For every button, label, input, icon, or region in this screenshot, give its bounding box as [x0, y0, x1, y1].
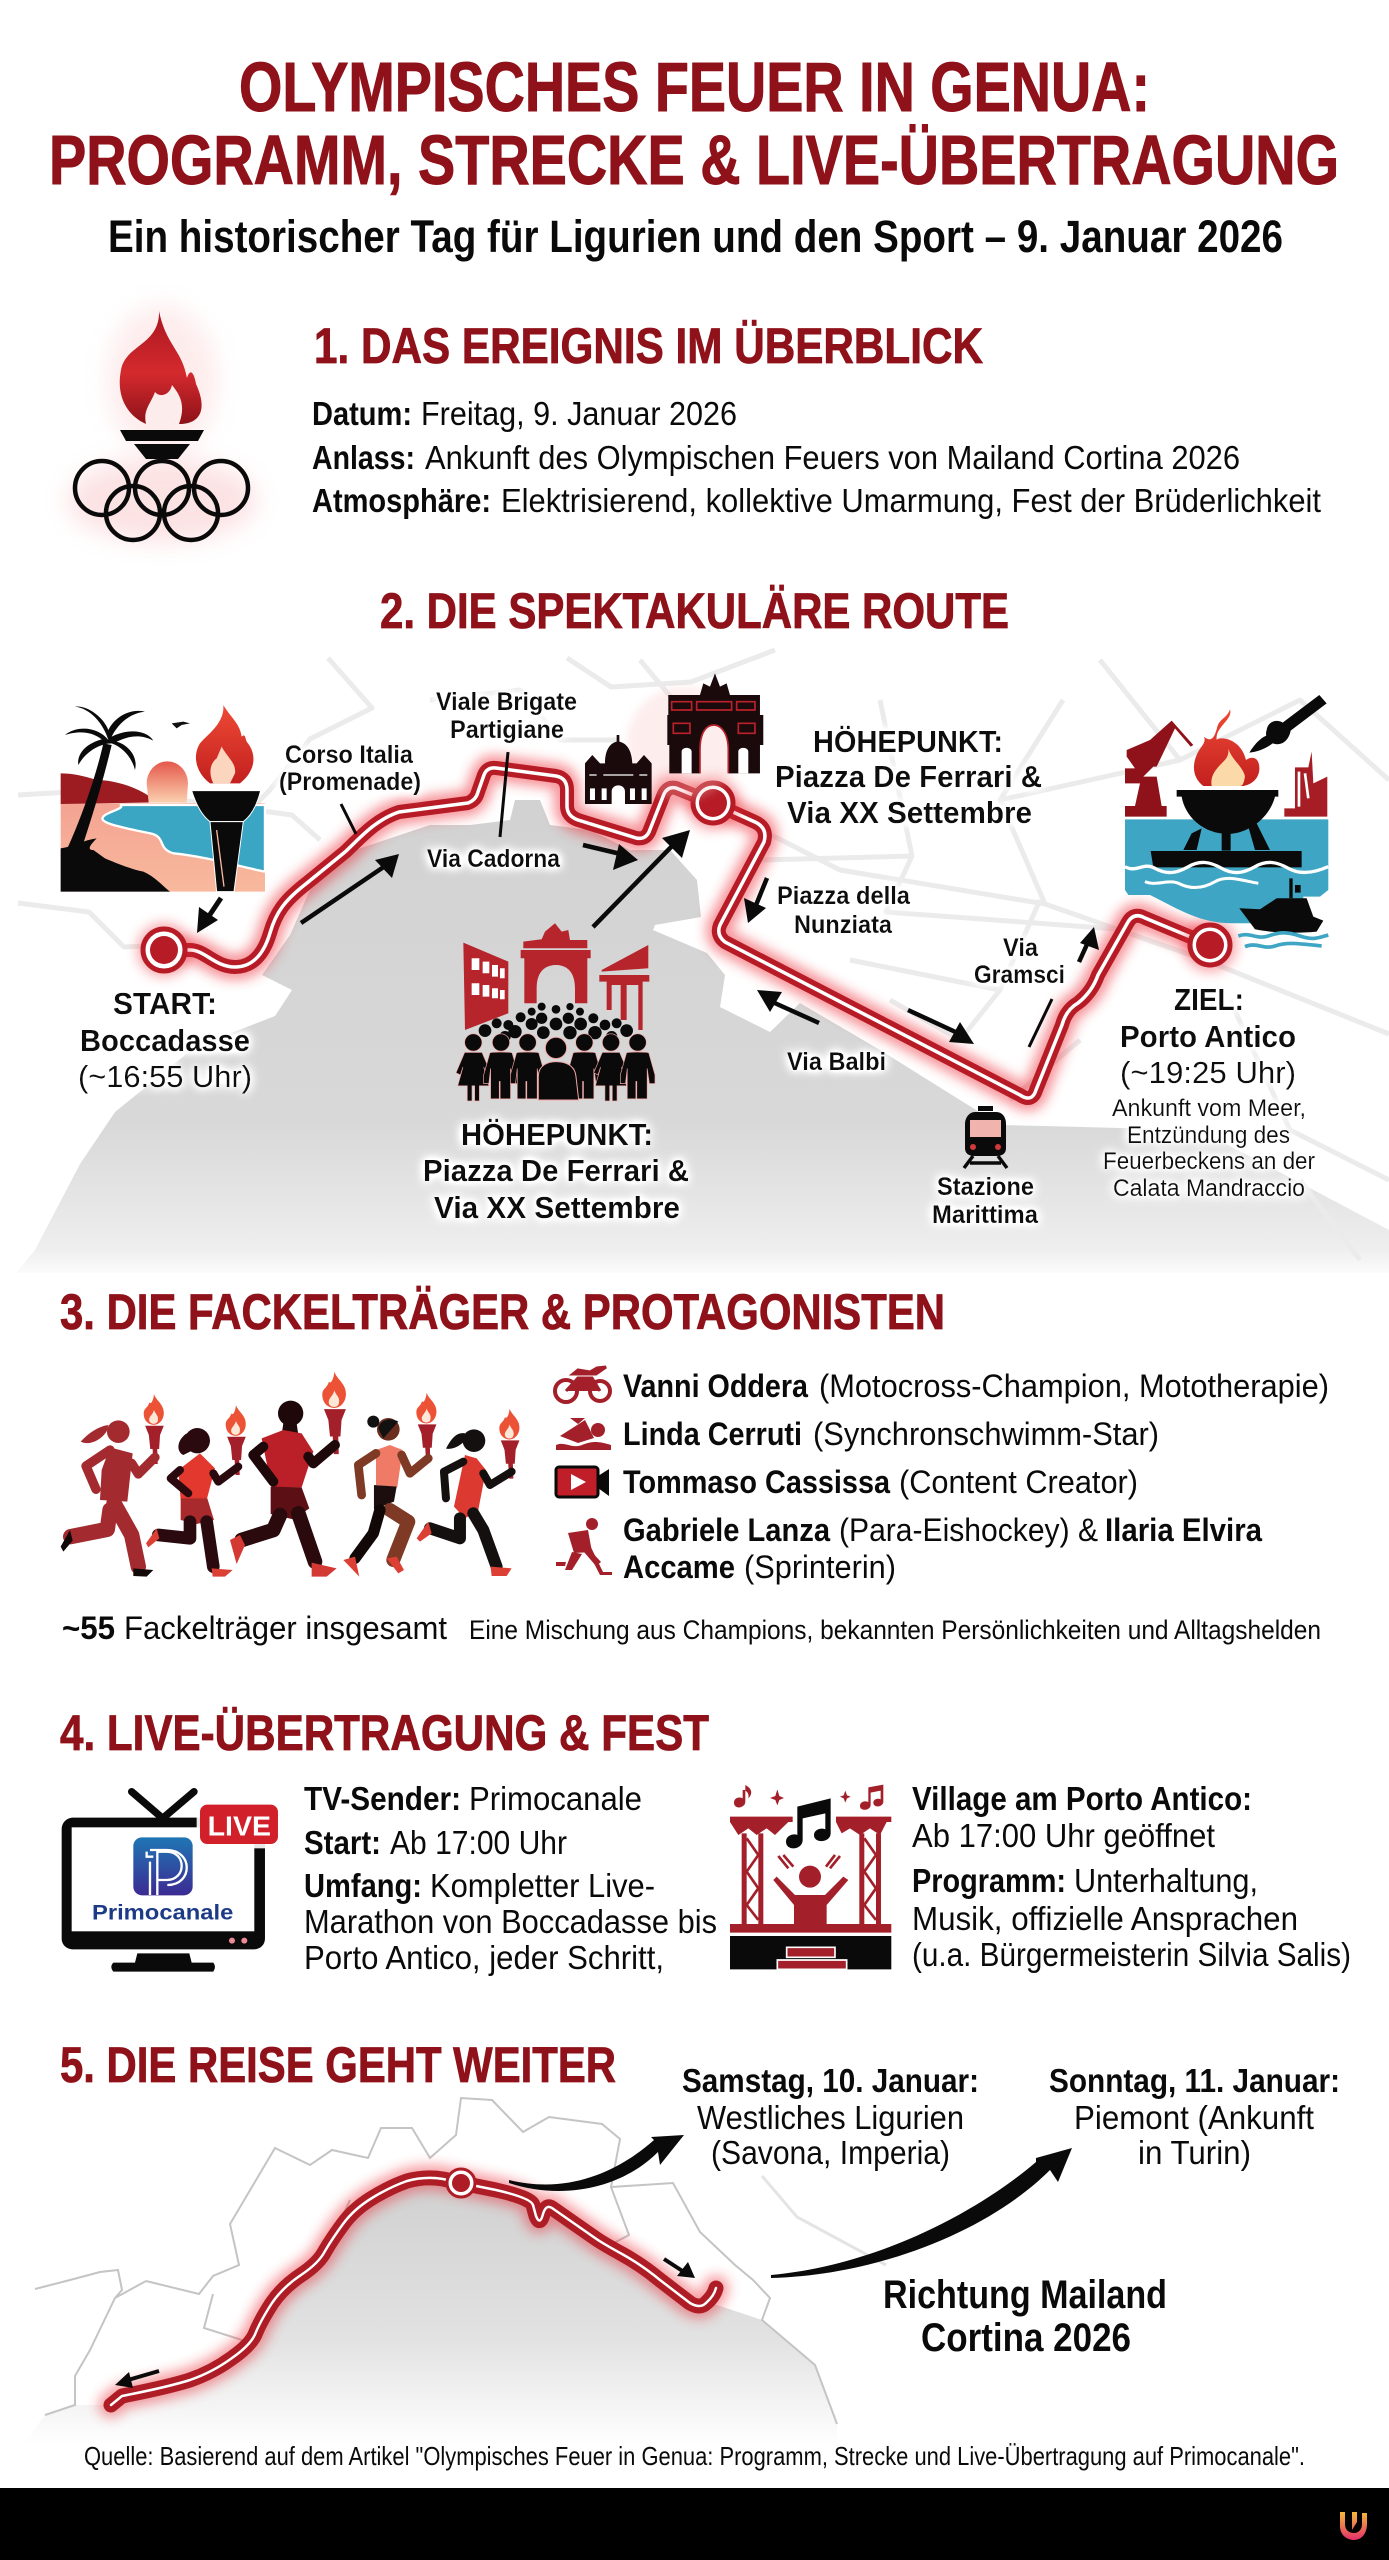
- highlight label right: HÖHEPUNKT:: [813, 724, 1003, 759]
- schedule: saturday: (Savona, Imperia): [711, 2134, 950, 2171]
- genoa marker: [447, 2169, 475, 2197]
- highlight label centre: [423, 1117, 689, 1225]
- entry: Linda Cerruti: Linda Cerruti: [623, 1416, 802, 1452]
- street labels: (Promenade): [279, 768, 421, 796]
- icon: brand logo: [1340, 2512, 1367, 2540]
- icon: harbour brazier: [1125, 695, 1328, 947]
- panel: TV broadcast text: [304, 1780, 717, 1976]
- icon: crowd at the piazza: [456, 923, 655, 1101]
- icon: concert stage: [730, 1785, 891, 1969]
- highlight label centre: Piazza De Ferrari &: [423, 1153, 689, 1188]
- icon: para hockey: [556, 1518, 612, 1575]
- overview facts: Freitag, 9. Januar 2026: [421, 395, 737, 432]
- icon: video camera: [556, 1467, 609, 1497]
- footer bar: [0, 2488, 1389, 2560]
- street labels: [279, 688, 1065, 1076]
- panel: TV broadcast text: Marathon von Boccadasse bis: [304, 1903, 717, 1940]
- entry: Tommaso Cassissa: [623, 1464, 1138, 1500]
- panel: TV broadcast text: Primocanale: [469, 1780, 642, 1817]
- street labels: Gramsci: [974, 961, 1065, 989]
- station label: Marittima: [932, 1201, 1039, 1229]
- runner 3: [230, 1372, 346, 1577]
- entry: Vanni Oddera: (Motocross-Champion, Mototherapie): [819, 1368, 1329, 1404]
- panel: liguria map: [27, 2098, 886, 2445]
- map: sea and harbour area: [16, 800, 1389, 1273]
- route glow line: [111, 2178, 716, 2405]
- entry: Lanza and Accame: Gabriele Lanza: [623, 1512, 830, 1548]
- runner 4: [343, 1393, 436, 1577]
- finish label: ZIEL:: [1174, 982, 1244, 1017]
- station label: [932, 1173, 1039, 1229]
- icon: train: [964, 1106, 1007, 1168]
- panel: TV broadcast text: Umfang:: [304, 1867, 422, 1904]
- icon: five torch runners: [61, 1372, 519, 1577]
- map: sea: [27, 2176, 837, 2445]
- schedule: sunday: Sonntag, 11. Januar:: [1049, 2062, 1340, 2099]
- icon: TV with live badge: Primocanale: [92, 1900, 233, 1924]
- street labels: Nunziata: [794, 911, 893, 939]
- finish label: Porto Antico: [1120, 1019, 1296, 1054]
- direction label: Cortina 2026: [921, 2316, 1131, 2360]
- start label: (~16:55 Uhr): [78, 1059, 252, 1094]
- schedule: saturday: Westliches Ligurien: [697, 2099, 964, 2136]
- overview facts: Elektrisierend, kollektive Umarmung, Fest der Brüderlichkeit: [501, 482, 1321, 519]
- icon: triumphal arch: [627, 673, 763, 800]
- panel: village text: Unterhaltung,: [1074, 1862, 1258, 1899]
- street labels: Corso Italia: [285, 741, 414, 769]
- panel: TV broadcast text: Ab 17:00 Uhr: [390, 1824, 567, 1861]
- highlight label centre: HÖHEPUNKT:: [461, 1117, 653, 1152]
- panel: village text: Programm:: [912, 1862, 1066, 1899]
- icon: swimmer: [556, 1418, 611, 1450]
- schedule: sunday: in Turin): [1138, 2134, 1251, 2171]
- icon: TV with live badge: LIVE: [208, 1810, 271, 1841]
- panel: TV broadcast text: Porto Antico, jeder Schritt,: [304, 1939, 664, 1976]
- panel: genoa route map: [16, 650, 1389, 1273]
- panel: village text: [912, 1780, 1351, 1973]
- entry: Linda Cerruti: (Synchronschwimm-Star): [813, 1416, 1159, 1452]
- panel: TV broadcast text: Start:: [304, 1824, 381, 1861]
- icon: cathedral: [585, 735, 652, 804]
- street labels: Partigiane: [450, 716, 564, 744]
- heading 5: 5. DIE REISE GEHT WEITER: [60, 2037, 616, 2093]
- station label: Stazione: [937, 1173, 1034, 1201]
- title: [49, 48, 1339, 199]
- finish label: Entzündung des: [1127, 1122, 1290, 1149]
- heading 2: 2. DIE SPEKTAKULÄRE ROUTE: [380, 583, 1009, 639]
- route markers: [137, 776, 1237, 977]
- entry: Lanza and Accame: (Para-Eishockey) &: [839, 1512, 1098, 1548]
- panel: event overview: [312, 318, 1321, 519]
- highlight label centre: Via XX Settembre: [434, 1190, 680, 1225]
- icon: TV with live badge: [62, 1792, 282, 1972]
- schedule: saturday: Samstag, 10. Januar:: [682, 2062, 979, 2099]
- runner 2: [146, 1405, 246, 1577]
- arrows and leader lines: [197, 752, 1099, 1047]
- map: street network: [18, 650, 1389, 1260]
- icon: beach and torch: [61, 705, 265, 892]
- highlight label right: Via XX Settembre: [787, 795, 1032, 830]
- overview facts: Datum:: [312, 395, 412, 432]
- torchbearer summary: Fackelträger insgesamt: [124, 1610, 447, 1646]
- title: OLYMPISCHES FEUER IN GENUA:: [239, 48, 1150, 126]
- start label: START:: [113, 986, 217, 1021]
- direction label: [883, 2273, 1167, 2360]
- small direction arrows: [115, 2259, 695, 2388]
- entry: Lanza and Accame: Accame: [623, 1549, 735, 1585]
- finish label: [1103, 982, 1315, 1202]
- highlight label right: [775, 724, 1042, 830]
- torchbearer summary: Eine Mischung aus Champions, bekannten Persönlichkeiten und Alltagshelden: [469, 1615, 1321, 1645]
- entry: Linda Cerruti: [623, 1416, 1159, 1452]
- entry: Tommaso Cassissa: Tommaso Cassissa: [623, 1464, 890, 1500]
- entry: Tommaso Cassissa: (Content Creator): [899, 1464, 1138, 1500]
- finish label: Calata Mandraccio: [1113, 1175, 1305, 1202]
- panel: village text: Village am Porto Antico:: [912, 1780, 1252, 1817]
- schedule: saturday: [682, 2062, 979, 2171]
- runner 5: [417, 1409, 519, 1576]
- finish label: Feuerbeckens an der: [1103, 1148, 1315, 1175]
- map labels: [78, 688, 1315, 1229]
- entry: Lanza and Accame: Ilaria Elvira: [1105, 1512, 1262, 1548]
- overview facts: Ankunft des Olympischen Feuers von Mailand Cortina 2026: [425, 439, 1240, 476]
- finish label: Ankunft vom Meer,: [1112, 1095, 1306, 1122]
- heading 1: 1. DAS EREIGNIS IM ÜBERBLICK: [314, 318, 983, 374]
- heading 3: 3. DIE FACKELTRÄGER & PROTAGONISTEN: [60, 1284, 945, 1340]
- panel: village text: Ab 17:00 Uhr geöffnet: [912, 1817, 1215, 1854]
- entry: Lanza and Accame: (Sprinterin): [744, 1549, 896, 1585]
- icon: olympic torch with rings: [67, 305, 257, 542]
- arrow to piedmont: [771, 2148, 1072, 2278]
- torchbearer summary: ~55: [62, 1610, 115, 1646]
- direction label: Richtung Mailand: [883, 2273, 1167, 2317]
- start label: Boccadasse: [80, 1023, 250, 1058]
- panel: village text: Musik, offizielle Ansprachen: [912, 1900, 1298, 1937]
- schedule: sunday: Piemont (Ankunft: [1074, 2099, 1314, 2136]
- street labels: Piazza della: [777, 882, 911, 910]
- route line: [164, 768, 1210, 1098]
- torchbearer summary: [62, 1610, 1321, 1646]
- street labels: Via Balbi: [787, 1048, 886, 1076]
- start label: [78, 986, 252, 1094]
- map: region borders: [35, 2098, 886, 2424]
- overview facts: [312, 395, 1321, 519]
- panel: TV broadcast text: TV-Sender:: [304, 1780, 461, 1817]
- panel: TV broadcast text: Kompletter Live-: [430, 1867, 655, 1904]
- schedule: sunday: [1049, 2062, 1340, 2171]
- arrow to western liguria: [509, 2135, 684, 2191]
- overview facts: Atmosphäre:: [312, 482, 491, 519]
- entry: Lanza and Accame: [623, 1512, 1262, 1585]
- panel: village text: (u.a. Bürgermeisterin Silvia Salis): [912, 1936, 1351, 1973]
- street labels: Via Cadorna: [427, 845, 561, 873]
- finish label: (~19:25 Uhr): [1120, 1055, 1296, 1090]
- overview facts: Anlass:: [312, 439, 415, 476]
- heading 4: 4. LIVE-ÜBERTRAGUNG & FEST: [60, 1705, 709, 1761]
- entry: Vanni Oddera: Vanni Oddera: [623, 1368, 808, 1404]
- panel: protagonists list: [555, 1367, 1329, 1585]
- runner 1: [61, 1394, 164, 1577]
- street labels: Via: [1003, 934, 1039, 962]
- icon: motocross: [555, 1367, 610, 1402]
- highlight label right: Piazza De Ferrari &: [775, 759, 1042, 794]
- street labels: Viale Brigate: [436, 688, 577, 716]
